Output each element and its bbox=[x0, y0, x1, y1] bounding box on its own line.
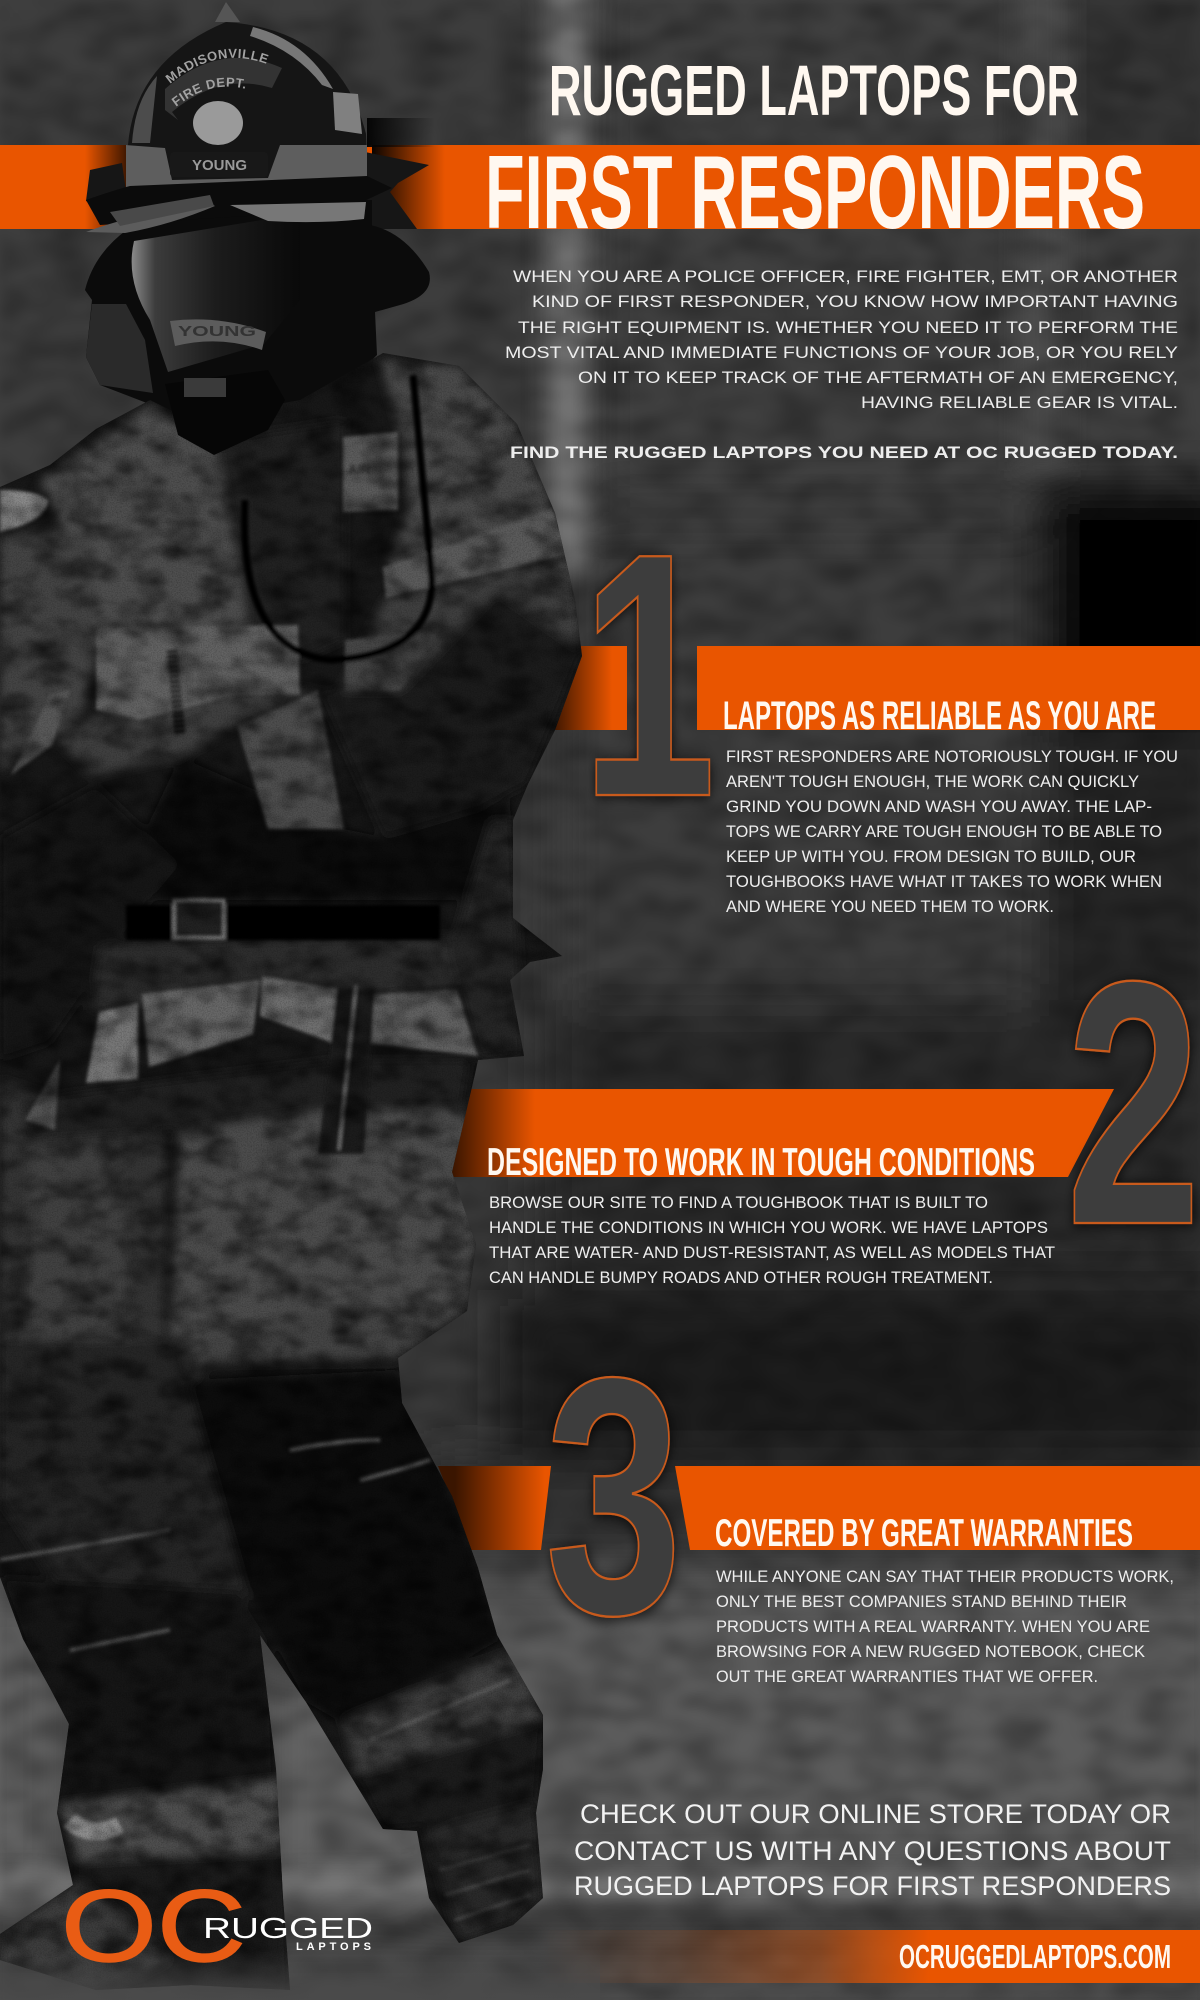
side module bbox=[86, 304, 153, 393]
right leg band bbox=[344, 1650, 543, 1775]
panel 2 body: BROWSE OUR SITE TO FIND A TOUGHBOOK THAT IS BUILT TO bbox=[489, 1193, 988, 1212]
helmet shield plates bbox=[165, 58, 282, 120]
hood and head bbox=[85, 225, 430, 460]
panel 1 body: FIRST RESPONDERS ARE NOTORIOUSLY TOUGH. IF YOU bbox=[726, 747, 1178, 766]
panel 2 band bbox=[451, 1089, 1114, 1177]
knee and right leg bbox=[187, 1370, 500, 1724]
mask name band: YOUNG bbox=[178, 323, 256, 340]
helmet finial bbox=[215, 2, 240, 22]
grain bbox=[0, 0, 600, 2000]
panel 3 body: PRODUCTS WITH A REAL WARRANTY. WHEN YOU ARE bbox=[716, 1617, 1150, 1636]
panel 3 body: WHILE ANYONE CAN SAY THAT THEIR PRODUCTS WORK, bbox=[716, 1567, 1174, 1586]
panel 1 body: KEEP UP WITH YOU. FROM DESIGN TO BUILD, OUR bbox=[726, 847, 1136, 866]
chest reflective stripe bbox=[96, 625, 300, 720]
respirator bbox=[165, 370, 285, 455]
number 2: 2 bbox=[1066, 910, 1200, 1297]
strap bbox=[318, 989, 375, 1154]
pants mid bbox=[170, 1110, 476, 1345]
helmet upper highlight bbox=[250, 27, 333, 89]
AIR pocket: AIR bbox=[348, 462, 371, 477]
intro text: MOST VITAL AND IMMEDIATE FUNCTIONS OF YOUR JOB, OR YOU RELY bbox=[505, 343, 1178, 362]
buckle bbox=[174, 900, 224, 938]
panel 3 body: BROWSING FOR A NEW RUGGED NOTEBOOK, CHECK bbox=[716, 1642, 1146, 1661]
left device bbox=[0, 530, 100, 770]
panel 2 body: THAT ARE WATER- AND DUST-RESISTANT, AS WELL AS MODELS THAT bbox=[489, 1243, 1055, 1262]
torso dark bbox=[148, 766, 512, 902]
upper sleeve bbox=[340, 553, 582, 700]
pants left panel bbox=[25, 1150, 130, 1345]
right boot bbox=[425, 1800, 543, 1943]
hose bbox=[245, 375, 432, 660]
logo OC mark: OC bbox=[61, 1869, 246, 1983]
gauge bbox=[0, 490, 48, 532]
mask lens bbox=[132, 219, 300, 372]
helmet left highlight bbox=[132, 76, 157, 143]
trouser folds bbox=[290, 1440, 510, 1740]
glove bbox=[0, 784, 180, 1060]
helmet fire dept text: FIRE DEPT. bbox=[172, 78, 246, 106]
helmet brim side flares bbox=[86, 152, 429, 229]
mask name band bbox=[170, 319, 266, 350]
coat left chest bbox=[40, 405, 250, 640]
header band bbox=[0, 145, 1200, 229]
panel 3 band left bbox=[438, 1466, 551, 1550]
panel 1 body: AREN'T TOUGH ENOUGH, THE WORK CAN QUICKLY bbox=[726, 772, 1139, 791]
coat right chest dark bbox=[218, 427, 343, 649]
firefighter figure bbox=[0, 2, 582, 1999]
panel 2 bbox=[487, 1141, 1055, 1287]
right chest stripe bbox=[345, 630, 440, 690]
panel 2 body: CAN HANDLE BUMPY ROADS AND OTHER ROUGH TREATMENT. bbox=[489, 1268, 993, 1287]
elbow dark bbox=[372, 591, 576, 836]
figure body bbox=[0, 353, 582, 1990]
call to action: RUGGED LAPTOPS FOR FIRST RESPONDERS bbox=[574, 1871, 1171, 1901]
knee cuff bbox=[180, 1309, 460, 1384]
panel 3 body: OUT THE GREAT WARRANTIES THAT WE OFFER. bbox=[716, 1667, 1098, 1686]
nameplate bbox=[170, 152, 268, 177]
waist dark bbox=[90, 935, 480, 1010]
logo laptops wordmark: LAPTOPS bbox=[296, 1941, 371, 1953]
title bbox=[485, 52, 1145, 251]
visor right bbox=[230, 202, 366, 222]
panel 3 bbox=[715, 1512, 1174, 1686]
AIR pocket bbox=[343, 432, 398, 512]
sleeve stripe bbox=[383, 509, 574, 598]
left leg stripe bbox=[57, 1780, 285, 1860]
boot toe bbox=[0, 1880, 170, 1990]
panel 2 body bbox=[489, 1193, 1055, 1287]
brim bbox=[86, 176, 392, 225]
lower left leg bbox=[0, 1577, 275, 1810]
intro text: ON IT TO KEEP TRACK OF THE AFTERMATH OF AN EMERGENCY, bbox=[578, 368, 1178, 387]
panel 1 bbox=[723, 694, 1178, 916]
upper left leg bbox=[0, 1340, 250, 1600]
coat lower chest bbox=[57, 690, 318, 775]
belt bbox=[126, 905, 440, 940]
helmet dome bbox=[128, 22, 367, 190]
panel 1 body: AND WHERE YOU NEED THEM TO WORK. bbox=[726, 897, 1054, 916]
helmet badge bbox=[193, 101, 243, 145]
cuff bbox=[237, 690, 344, 829]
respirator valve bbox=[184, 378, 226, 397]
intro text bbox=[505, 267, 1178, 462]
panel 2 body: HANDLE THE CONDITIONS IN WHICH YOU WORK. WE HAVE LAPTOPS bbox=[489, 1218, 1048, 1237]
figure folds texture bbox=[0, 0, 600, 2000]
dark gap under brim bbox=[110, 200, 372, 235]
intro text: HAVING RELIABLE GEAR IS VITAL. bbox=[861, 393, 1178, 412]
number 3: 3 bbox=[545, 1307, 682, 1685]
panel 1 body: TOUGHBOOKS HAVE WHAT IT TAKES TO WORK WHEN bbox=[726, 872, 1162, 891]
panel 1 band left bbox=[540, 646, 627, 730]
side equipment bbox=[450, 820, 524, 1060]
number 1: 1 bbox=[581, 482, 716, 869]
helmet bbox=[86, 2, 392, 233]
helmet arched text: MADISONVILLE bbox=[165, 48, 268, 84]
panel 1 band right bbox=[697, 646, 1200, 730]
logo rugged wordmark: RUGGED bbox=[203, 1913, 373, 1945]
panel 1 body: GRIND YOU DOWN AND WASH YOU AWAY. THE LAP- bbox=[726, 797, 1152, 816]
helmet front band bbox=[126, 145, 367, 192]
call to action: CONTACT US WITH ANY QUESTIONS ABOUT bbox=[574, 1836, 1171, 1866]
call to action bbox=[574, 1799, 1171, 1901]
helmet right box highlight bbox=[333, 92, 362, 134]
dark block behind helmet bbox=[367, 118, 435, 147]
footer band bbox=[530, 1930, 1200, 1983]
waist stripes bbox=[142, 980, 260, 1067]
logo bbox=[61, 1869, 373, 1983]
shoulder bbox=[380, 360, 560, 570]
intro text: WHEN YOU ARE A POLICE OFFICER, FIRE FIGHTER, EMT, OR ANOTHER bbox=[513, 267, 1178, 286]
panel 1 body: TOPS WE CARRY ARE TOUGH ENOUGH TO BE ABLE TO bbox=[726, 822, 1162, 841]
nameplate: YOUNG bbox=[192, 157, 247, 174]
hand highlight bbox=[11, 690, 70, 775]
call to action: CHECK OUT OUR ONLINE STORE TODAY OR bbox=[580, 1799, 1171, 1829]
coat hem bbox=[20, 1060, 470, 1140]
visor left bbox=[86, 203, 215, 233]
coiled cord bbox=[172, 650, 180, 735]
panel 3 band right bbox=[675, 1466, 1200, 1550]
boot fade into ground bbox=[0, 1950, 600, 2000]
panel 3 body bbox=[716, 1567, 1174, 1686]
panel 3 body: ONLY THE BEST COMPANIES STAND BEHIND THEIR bbox=[716, 1592, 1127, 1611]
pants left bbox=[0, 1080, 165, 1440]
intro text: FIND THE RUGGED LAPTOPS YOU NEED AT OC RUGGED TODAY. bbox=[510, 443, 1178, 462]
panel 1 body bbox=[726, 747, 1178, 916]
left leg lower bbox=[70, 1850, 290, 1990]
intro text: THE RIGHT EQUIPMENT IS. WHETHER YOU NEED IT TO PERFORM THE bbox=[518, 318, 1178, 337]
shin bbox=[356, 1722, 543, 1830]
intro text: KIND OF FIRST RESPONDER, YOU KNOW HOW IMPORTANT HAVING bbox=[532, 292, 1178, 311]
